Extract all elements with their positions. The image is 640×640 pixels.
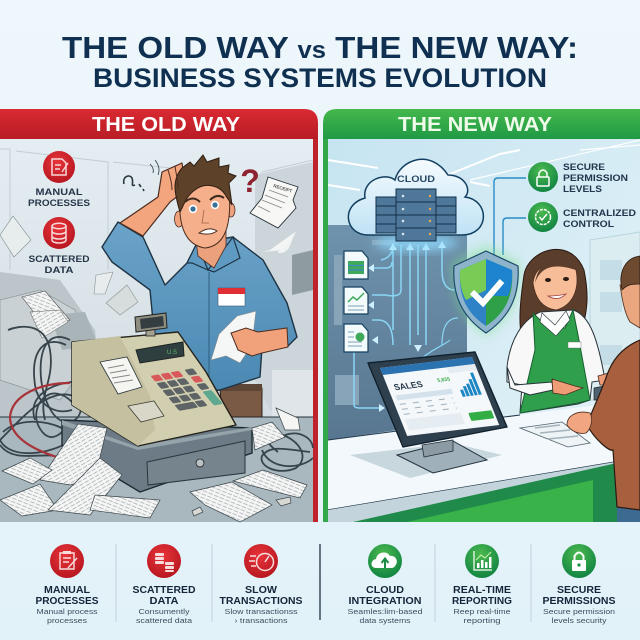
icon: confusion squiggle (124, 160, 159, 191)
title: BUSINESS SYSTEMS EVOLUTION (93, 63, 547, 93)
icon: manual processes (43, 151, 75, 183)
benefit: manual processes: Manual process (36, 607, 98, 616)
icon: question mark: ? (240, 163, 260, 199)
keypad (150, 368, 223, 412)
label: scattered data: DATA (44, 265, 74, 275)
benefit: manual processes: MANUAL (44, 585, 90, 596)
panel: the old way (0, 109, 318, 522)
floating receipt (250, 177, 298, 228)
badge: secure permission levels: LEVELS (563, 184, 602, 194)
badge: centralized control: CONTROL (563, 219, 614, 229)
benefit: secure permissions: Secure permission (543, 607, 615, 616)
benefit: cloud integration: CLOUD (366, 585, 404, 596)
benefit: scattered data: scattered data (136, 616, 193, 625)
cash register (62, 313, 252, 492)
tablet pos (368, 352, 507, 473)
benefit: manual processes: processes (47, 616, 87, 625)
label: manual processes: PROCESSES (28, 198, 90, 208)
badge: secure permission levels (528, 162, 628, 194)
benefit: manual processes: PROCESSES (36, 596, 99, 607)
connector lines (494, 178, 526, 255)
tablet pos: 5,835 (436, 377, 451, 384)
benefit: real-time reporting: REAL-TIME (453, 585, 511, 596)
benefit: scattered data: SCATTERED (132, 585, 196, 596)
label: manual processes: MANUAL (36, 187, 83, 197)
header: new way: THE NEW WAY (398, 114, 553, 136)
benefit: scattered data (132, 544, 196, 625)
cloud with server: CLOUD (397, 174, 435, 185)
label: scattered data: SCATTERED (28, 254, 90, 264)
panel: the new way (323, 109, 640, 522)
benefit: slow transactions: TRANSACTIONS (220, 596, 303, 607)
cash register: U.S (167, 350, 177, 356)
benefit: secure permissions: levels security (552, 616, 607, 625)
title (62, 30, 578, 93)
benefit: manual processes (36, 544, 99, 625)
label: scattered data (28, 254, 90, 275)
name badge (218, 288, 245, 306)
badge: secure permission levels: PERMISSION (563, 173, 628, 183)
benefit: real-time reporting: REPORTING (452, 596, 512, 607)
title: THE OLD WAY vs THE NEW WAY: (62, 30, 578, 65)
benefit: scattered data: DATA (150, 596, 178, 607)
customer (567, 256, 640, 522)
display pole (135, 313, 167, 336)
shield with check (452, 245, 520, 336)
counter (328, 403, 617, 522)
header: new way (323, 109, 640, 139)
benefit: real-time reporting: reporting (464, 616, 500, 625)
receipt on counter (520, 422, 590, 447)
header: old way: THE OLD WAY (92, 114, 241, 136)
document icons (344, 251, 368, 352)
label: manual processes (28, 187, 90, 208)
badge: centralized control: CENTRALIZED (563, 208, 636, 218)
benefit: slow transactions: Slow transactionss (224, 607, 298, 616)
tablet pos: SALES (392, 379, 424, 392)
cables (0, 327, 313, 471)
scattered receipts (0, 408, 307, 522)
badge: secure permission levels: SECURE (563, 162, 605, 172)
benefit: cloud integration (348, 544, 422, 625)
benefit: cloud integration: Seamles:lim-based (348, 607, 422, 616)
benefit: slow transactions: SLOW (245, 585, 278, 596)
benefit: secure permissions (542, 544, 616, 625)
benefit: slow transactions (220, 544, 303, 625)
data flow arrows (354, 241, 458, 412)
benefit: scattered data: Consumently (138, 607, 190, 616)
person: stressed cashier (102, 155, 297, 417)
floating receipt: RECEIPT (273, 183, 293, 194)
benefit: cloud integration: INTEGRATION (348, 596, 422, 607)
benefit: real-time reporting (452, 544, 512, 625)
benefit: secure permissions: SECURE (557, 585, 601, 596)
receipt printer (100, 357, 142, 394)
benefit: cloud integration: data systems (360, 616, 411, 625)
icon: scattered data (43, 217, 75, 249)
badge: centralized control (528, 202, 636, 232)
header: old way (0, 109, 318, 139)
benefit: secure permissions: PERMISSIONS (542, 596, 616, 607)
benefit: real-time reporting: Reep real-time (454, 607, 510, 616)
cloud with server (348, 159, 483, 251)
cashier (507, 249, 614, 413)
benefit: slow transactions: › transactions (234, 616, 288, 625)
